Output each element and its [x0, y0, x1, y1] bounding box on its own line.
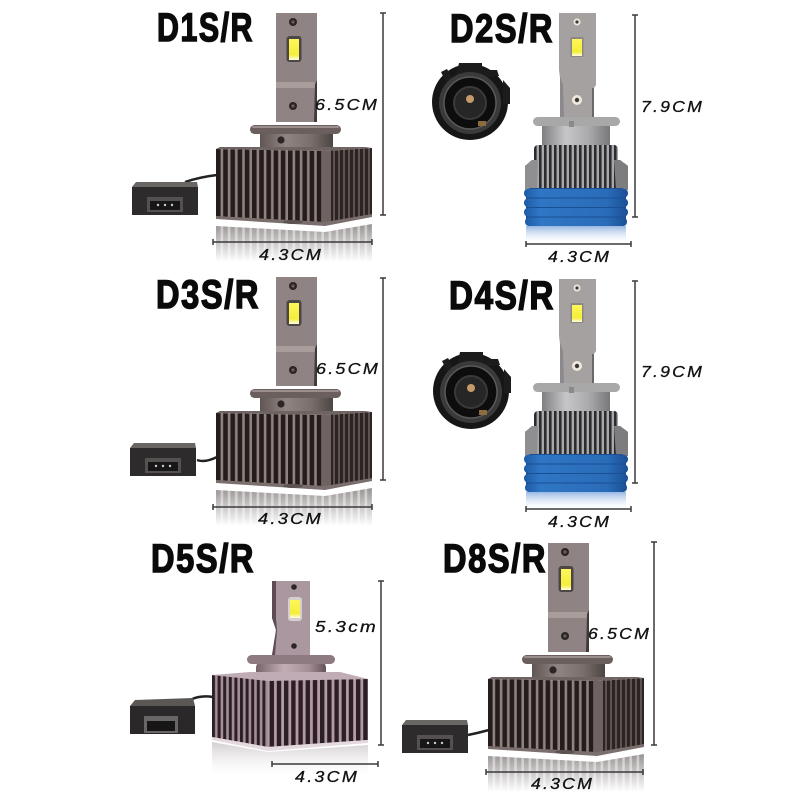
width dimension line: [213, 504, 372, 510]
label: width: 4.3CM: [548, 514, 611, 531]
height dimension line: [378, 581, 384, 745]
connector wire: [190, 696, 213, 700]
connector box: [130, 443, 196, 476]
label: width: 4.3CM: [531, 776, 594, 793]
panel: D5S/R: [130, 537, 384, 786]
heading: D2S/R: D2S/R: [450, 7, 554, 51]
label: width: 4.3CM: [258, 511, 323, 528]
panel: D1S/R: [132, 6, 386, 264]
label: height: 6.5CM: [316, 361, 380, 378]
height dimension line: [651, 542, 657, 745]
label: width: 4.3CM: [548, 249, 611, 266]
icon: socket end view: [433, 352, 511, 429]
heading: D3S/R: D3S/R: [156, 273, 260, 317]
heading: D8S/R: D8S/R: [443, 537, 547, 581]
bulb with heat sink: [488, 543, 644, 792]
label: height: 5.3cm: [315, 619, 378, 636]
connector wire: [185, 175, 217, 182]
bulb with heat sink: [216, 13, 372, 262]
width dimension line: [486, 769, 643, 775]
label: height: 7.9CM: [641, 99, 704, 116]
bulb with heat sink: [216, 277, 372, 526]
heading: D5S/R: D5S/R: [151, 537, 255, 581]
connector wire: [468, 730, 489, 735]
bulb with blue base: [524, 13, 628, 242]
label: width: 4.3CM: [295, 769, 359, 786]
width dimension line: [272, 761, 378, 767]
label: height: 7.9CM: [641, 364, 704, 381]
width dimension line: [213, 239, 372, 245]
connector box: [130, 698, 195, 734]
height dimension line: [632, 15, 638, 217]
connector box: [132, 182, 198, 215]
connector wire: [197, 457, 217, 461]
panel: D4S/R: [433, 274, 704, 531]
bulb with heat sink: [212, 581, 368, 775]
panel: D2S/R: [432, 7, 704, 266]
heading: D1S/R: D1S/R: [157, 6, 254, 50]
heading: D4S/R: D4S/R: [449, 274, 555, 318]
width dimension line: [526, 241, 631, 247]
panel: D3S/R: [130, 273, 386, 528]
label: height: 6.5CM: [588, 626, 651, 643]
panel: D8S/R: [402, 537, 657, 793]
label: height: 6.5CM: [315, 97, 379, 114]
height dimension line: [632, 281, 638, 483]
bulb with blue base: [524, 279, 628, 508]
connector box: [402, 720, 468, 753]
icon: socket end view: [432, 63, 510, 140]
label: width: 4.3CM: [259, 247, 323, 264]
height dimension line: [380, 13, 386, 215]
width dimension line: [526, 506, 631, 512]
height dimension line: [380, 278, 386, 480]
